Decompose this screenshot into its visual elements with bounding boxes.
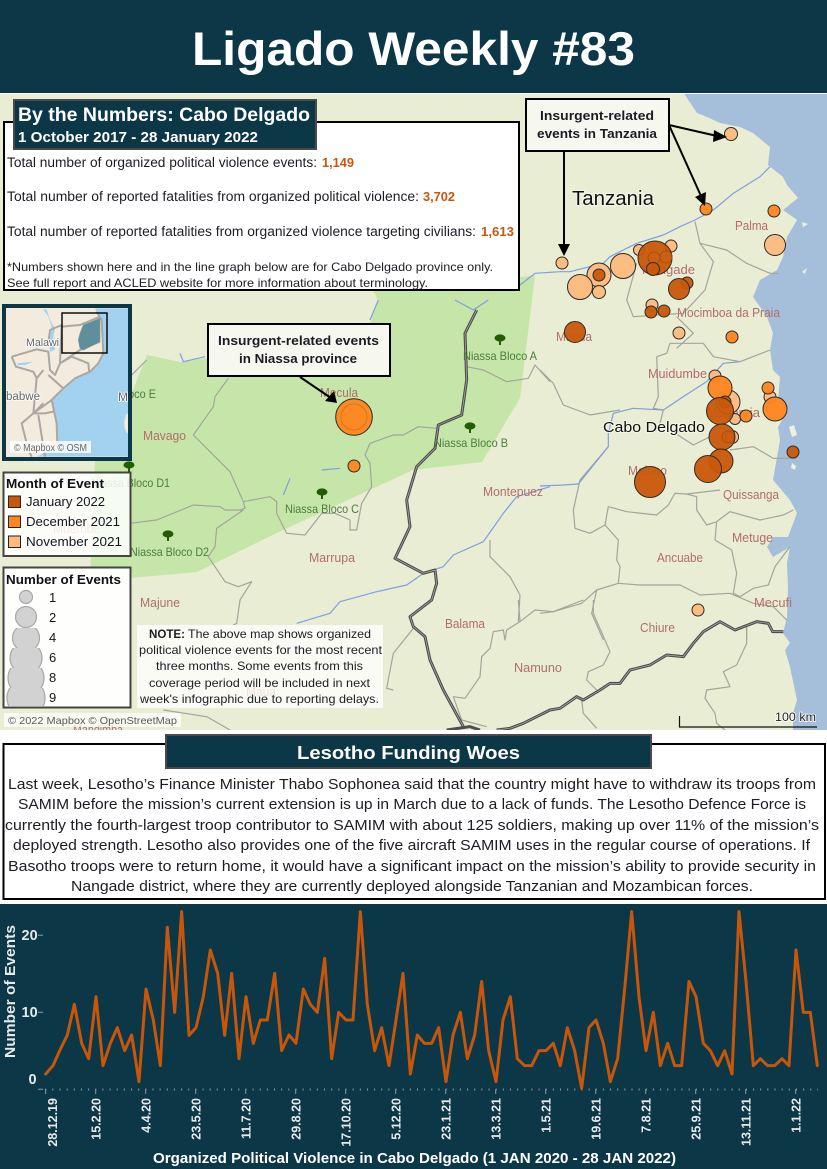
roads [395, 310, 783, 730]
chart date labels: 25.9.21 [690, 1098, 704, 1140]
title: Ligado Weekly #83 [192, 22, 635, 75]
chart date labels: 4.4.20 [140, 1098, 154, 1133]
footnote: *Numbers shown here and in the line graph below are for Cabo Delgado province only. [7, 260, 493, 274]
district labels: Mandimba [73, 723, 123, 737]
inset locator map: babwe [6, 391, 40, 403]
note box: coverage period will be included in next [149, 676, 371, 690]
chart date labels: 5.12.20 [390, 1098, 404, 1140]
chart date labels: 11.7.20 [240, 1098, 254, 1139]
map attribution: © 2022 Mapbox © OpenStreetMap [8, 715, 177, 727]
park labels and tree icons: Niassa Bloco D2 [130, 545, 209, 559]
national parks green area [90, 275, 535, 578]
size scale labels: 6 [49, 650, 56, 665]
district labels: Marrupa [309, 551, 355, 565]
district labels: Metuge [732, 531, 773, 545]
panel heading: 1 October 2017 - 28 January 2022 [18, 129, 258, 146]
note box [137, 625, 383, 708]
footnote: See full report and ACLED website for more information about terminology. [7, 276, 428, 290]
district labels [53, 219, 792, 737]
legend item: December 2021: December 2021 [26, 514, 120, 529]
size scale labels: 9 [49, 690, 56, 705]
district labels: Mavago [143, 429, 186, 443]
footnote [7, 260, 493, 290]
chart title: Organized Political Violence in Cabo Delgado (1 JAN 2020 - 28 JAN 2022) [153, 1151, 676, 1167]
body text: Basotho troops were to return home, it would have a significant impact on the mission’s ability to provide security in [8, 859, 816, 875]
district labels: Ancuabe [657, 551, 703, 565]
park labels and tree icons: Niassa Bloco A [463, 349, 537, 363]
legend item: January 2022: January 2022 [26, 494, 105, 509]
panel: by the numbers [4, 100, 519, 290]
province label: Cabo Delgado: Cabo Delgado [603, 420, 705, 436]
panel: line chart [0, 904, 827, 1169]
district labels: Meluco [628, 464, 667, 478]
chart x axis ticks [45, 1089, 818, 1094]
note box: NOTE: [149, 627, 185, 641]
body text: Nangade district, where they are currently deployed alongside Tanzanian and Mozambican forces. [71, 879, 753, 895]
district labels: Balama [445, 617, 485, 631]
district labels: Mecufi [754, 596, 792, 610]
district labels: Muidumbe [648, 367, 707, 381]
size scale labels: 4 [49, 630, 56, 645]
country label: Tanzania: Tanzania [572, 187, 655, 210]
district labels: Mocimboa da Praia [677, 306, 780, 320]
body text: Last week, Lesotho’s Finance Minister Thabo Sophonea said that the country might have to withdraw its troops from [8, 777, 816, 793]
chart y axis: Number of Events [3, 925, 19, 1058]
size scale labels: 2 [49, 610, 56, 625]
district labels: Quissanga [723, 488, 779, 502]
stat: fatalities: Total number of reported fatalities from organized political violence: [7, 189, 419, 204]
note box: political violence events for the most recent [139, 643, 383, 657]
park labels and tree icons [82, 334, 537, 559]
chart date labels: 19.6.21 [590, 1098, 604, 1140]
note box: week's infographic due to reporting delays. [139, 692, 379, 706]
chart date labels: 15.2.20 [90, 1098, 104, 1140]
district labels: Mueda [556, 330, 592, 344]
size scale circles [7, 590, 45, 717]
size scale labels [49, 590, 56, 705]
chart y axis: 20 [22, 928, 38, 944]
park labels and tree icons: Niassa Bloco D1 [91, 476, 170, 490]
chart y axis: 0 [28, 1072, 37, 1088]
chart date labels [46, 1098, 804, 1147]
rivers [180, 167, 770, 623]
administrative borders [130, 222, 797, 730]
district labels: Muembe [53, 522, 100, 536]
islands [789, 222, 808, 470]
inset locator map: © Mapbox © OSM [14, 443, 87, 454]
stat: civilian fatalities: Total number of reported fatalities from organized violence targeting civilians: [7, 224, 476, 239]
park labels and tree icons: Niassa Bloco C [285, 502, 359, 516]
size scale labels: 1 [49, 590, 56, 605]
chart date labels: 1.5.21 [540, 1098, 554, 1133]
district labels: Nangade [642, 263, 695, 277]
panel heading: By the Numbers: Cabo Delgado [18, 104, 310, 126]
callout: Niassa events [208, 324, 390, 403]
district labels: Chiure [640, 621, 675, 635]
map: northern Mozambique [0, 94, 827, 737]
body text [5, 777, 819, 895]
stat: civilian fatalities: 1,613 [481, 224, 514, 239]
chart date labels: 23.5.20 [190, 1098, 204, 1140]
scale bar: 100 km [775, 710, 816, 724]
district labels: Namuno [514, 661, 562, 675]
panel heading [14, 100, 316, 149]
callout: Niassa events: Insurgent-related events [218, 334, 379, 348]
panel heading [166, 735, 651, 768]
park labels and tree icons: Niassa Bloco B [434, 436, 508, 450]
district labels: Montepuez [483, 485, 543, 499]
chart date labels: 17.10.20 [340, 1098, 354, 1147]
chart date labels: 7.8.21 [640, 1098, 654, 1133]
chart date labels: 28.12.19 [46, 1098, 60, 1147]
chart line: weekly events [46, 912, 817, 1088]
note box: The above map shows organized [188, 627, 371, 641]
chart date labels: 1.1.22 [790, 1098, 804, 1133]
chart date labels: 13.3.21 [490, 1098, 504, 1140]
note box: three months. Some events from this [156, 659, 363, 673]
event circles [336, 128, 799, 616]
inset locator map: Mo [118, 390, 135, 404]
callout: Tanzania events [526, 99, 727, 256]
chart date labels: 29.8.20 [290, 1098, 304, 1140]
district labels: Mecula [320, 386, 358, 400]
stat: events: 1,149 [322, 155, 354, 170]
chart date labels: 23.1.21 [440, 1098, 454, 1140]
district labels: Maua [246, 685, 276, 699]
chart y axis [3, 925, 43, 1089]
panel: Lesotho Funding Woes [4, 735, 825, 899]
legend item: November 2021: November 2021 [26, 534, 122, 549]
legend: month of event [4, 472, 130, 556]
body text: SAMIM before the mission’s current extension is up in March due to a lack of funds. The Lesotho Defence Force is [18, 797, 806, 813]
district labels: Palma [735, 219, 768, 233]
scale bar [680, 710, 817, 727]
ocean [685, 94, 827, 730]
district labels: Macomia [706, 406, 760, 420]
legend: number of events [4, 568, 130, 717]
body text: currently the fourth-largest troop contributor to SAMIM with about 125 soldiers, making up over 11% of the mission’s [5, 818, 819, 834]
chart y axis: 10 [22, 1005, 38, 1021]
legend: month of event: Month of Event [6, 476, 105, 491]
stat: events: Total number of organized political violence events: [7, 155, 317, 170]
district labels: Majune [140, 596, 180, 610]
panel heading: Lesotho Funding Woes [297, 742, 520, 763]
callout: Tanzania events: Insurgent-related [540, 109, 654, 123]
inset locator map: Malawi [26, 337, 59, 349]
callout: Tanzania events: events in Tanzania [537, 127, 658, 141]
body text: deployed strength. Lesotho also provides one of the five aircraft SAMIM uses in the regular course of operations. If [13, 838, 811, 854]
legend: number of events: Number of Events [6, 572, 121, 587]
header banner [0, 0, 827, 93]
stat: fatalities: 3,702 [423, 189, 455, 204]
size scale labels: 8 [49, 670, 56, 685]
inset locator map [4, 306, 135, 459]
park labels and tree icons: Niassa Bloco E [82, 387, 156, 401]
chart date labels: 13.11.21 [740, 1098, 754, 1146]
callout: Niassa events: in Niassa province [239, 352, 357, 366]
